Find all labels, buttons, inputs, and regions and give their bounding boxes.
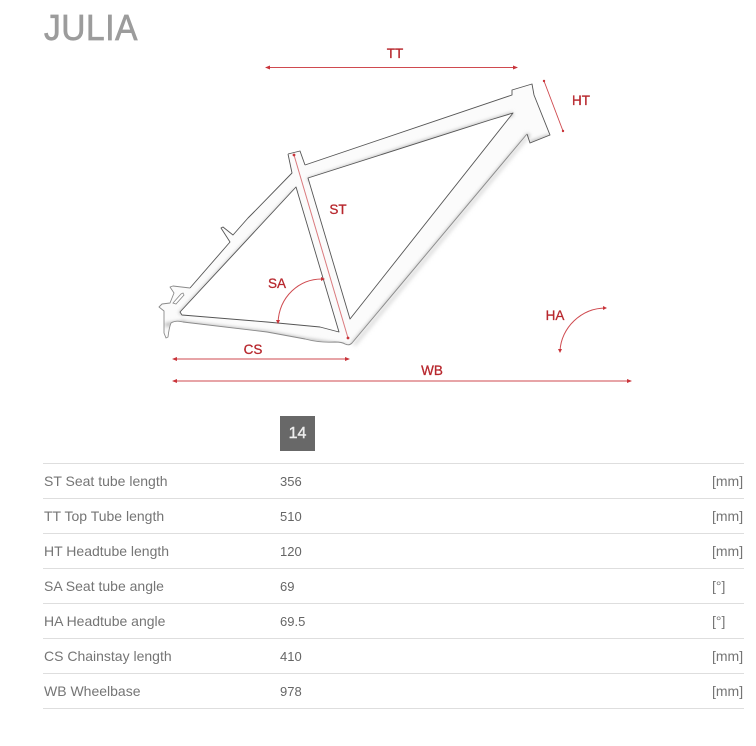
frame [159, 84, 550, 346]
row: WB [44, 683, 743, 699]
row: WB: 978 [280, 684, 302, 699]
size header box: 14 [289, 425, 306, 442]
dimension CS [172, 357, 350, 361]
row: ST: [mm] [712, 473, 743, 489]
row: TT [44, 508, 743, 524]
row: CS: 410 [280, 649, 302, 664]
row: TT: [mm] [712, 508, 743, 524]
row: WB: WB Wheelbase [44, 683, 140, 699]
dimension labels [244, 46, 590, 378]
row: ST: ST Seat tube length [44, 473, 168, 489]
row: HT: [mm] [712, 543, 743, 559]
dimension labels: WB [421, 363, 443, 378]
row: SA: [°] [712, 578, 725, 594]
angle SA [276, 277, 325, 324]
row: CS [44, 648, 743, 664]
row: WB: [mm] [712, 683, 743, 699]
row: HT: HT Headtube length [44, 543, 169, 559]
frame outline dark [180, 84, 550, 332]
dimension labels: SA [268, 276, 286, 291]
row: TT: TT Top Tube length [44, 508, 164, 524]
dimension ST [293, 154, 349, 339]
title: JULIA [44, 7, 138, 48]
dimension labels: ST [329, 202, 347, 217]
row: HT [44, 543, 743, 559]
soft shadow of down tube [354, 137, 527, 345]
row: ST: 356 [280, 474, 302, 489]
dimension WB [172, 379, 632, 383]
table [43, 463, 744, 709]
row: HA: [°] [712, 613, 725, 629]
row: SA: SA Seat tube angle [44, 578, 164, 594]
frame outline light [159, 134, 527, 345]
row: SA: 69 [280, 579, 294, 594]
dropout slot [173, 293, 184, 304]
row: TT: 510 [280, 509, 302, 524]
dimension HT [543, 80, 564, 132]
frame silhouette [159, 84, 550, 345]
dimension labels: HA [546, 308, 564, 323]
dimension labels: HT [572, 93, 590, 108]
row: CS: [mm] [712, 648, 743, 664]
frame geometry diagram [158, 46, 632, 383]
row: HA: HA Headtube angle [44, 613, 165, 629]
angle HA [558, 306, 607, 353]
row: CS: CS Chainstay length [44, 648, 172, 664]
size header box [280, 416, 315, 451]
dimension labels: TT [387, 46, 403, 61]
row: ST [44, 473, 743, 489]
row: HT: 120 [280, 544, 302, 559]
tube shading [165, 114, 550, 346]
row: SA [44, 578, 725, 594]
dimension TT [265, 66, 518, 70]
row: HA: 69.5 [280, 614, 305, 629]
row: HA [44, 613, 725, 629]
dimension labels: CS [244, 342, 262, 357]
